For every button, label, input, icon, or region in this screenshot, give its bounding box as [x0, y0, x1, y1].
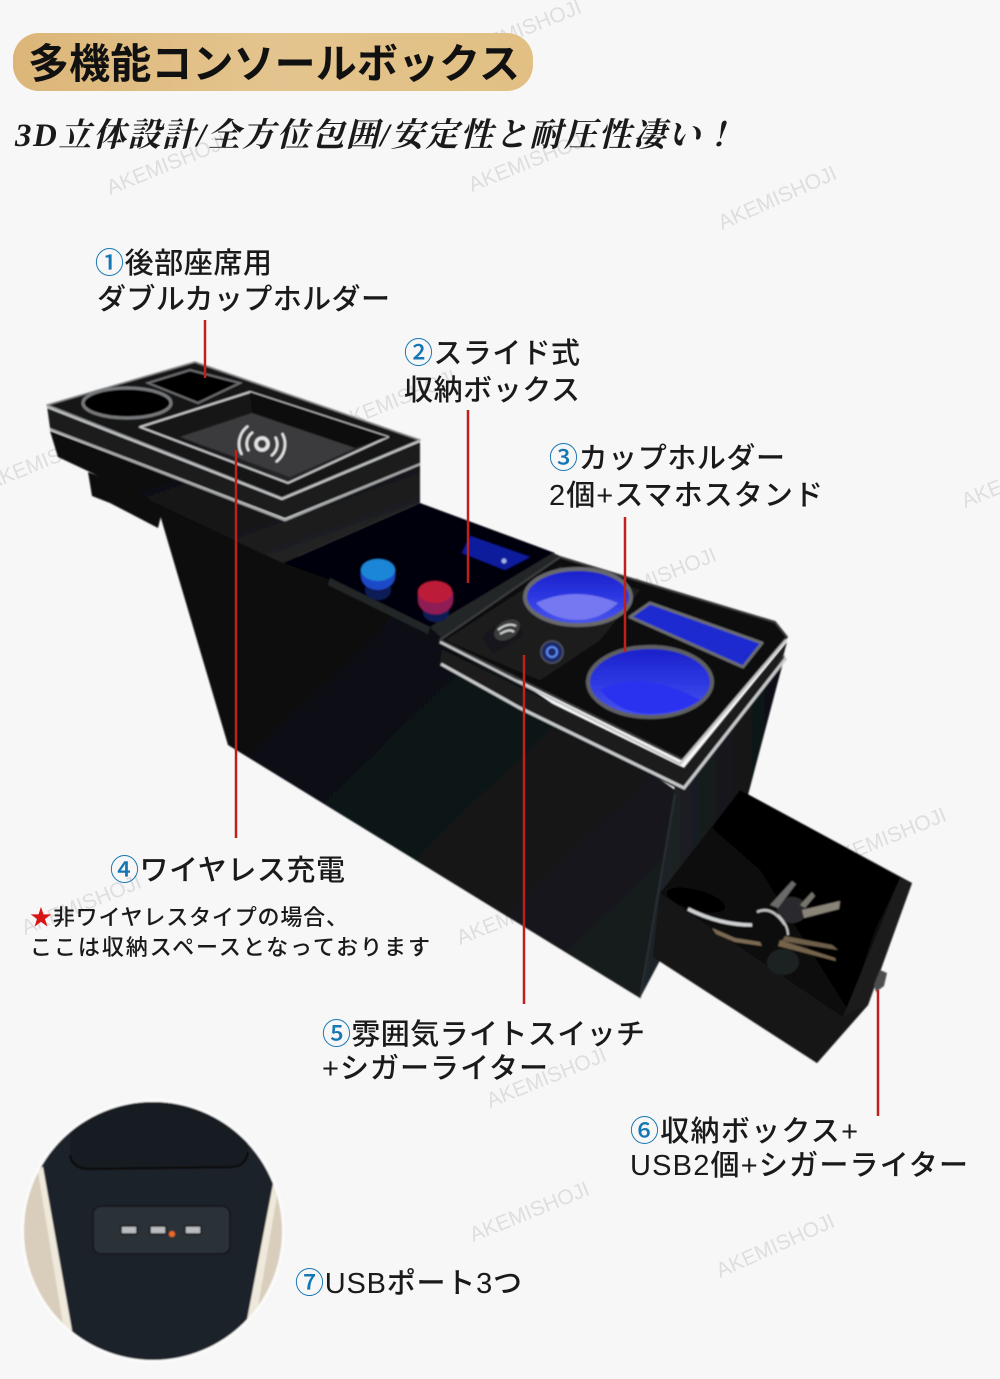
watermarks: AKEMISHOJI: [715, 162, 840, 235]
label 5: [322, 1018, 645, 1085]
note: [30, 905, 430, 960]
watermarks: AKEMISHOJI: [713, 1210, 838, 1283]
label 3: 2個+スマホスタンド: [549, 479, 823, 512]
label 3: [549, 442, 823, 512]
cigarette lighter socket: [481, 615, 525, 654]
USB detail circle: [20, 1095, 285, 1370]
drawer USB port: [874, 970, 887, 992]
ambient light switch: [541, 641, 563, 663]
label 5: ⑤雰囲気ライトスイッチ: [322, 1018, 645, 1051]
middle storage compartment: [283, 503, 565, 640]
label 1: ①後部座席用: [95, 247, 272, 280]
rear cup holder: [83, 388, 171, 418]
watermarks: AKEMISHOJI: [465, 128, 592, 197]
title pill: 多機能コンソールボックス: [28, 41, 520, 87]
label 6: USB2個+シガーライター: [630, 1149, 968, 1182]
label 5: +シガーライター: [322, 1052, 548, 1085]
armrest lid: [70, 1102, 248, 1170]
label 4: ④ワイヤレス充電: [110, 854, 345, 887]
mounting bracket: [88, 472, 165, 528]
label 7: ⑦USBポート3つ: [295, 1267, 522, 1300]
blue bottle: [361, 559, 395, 600]
watermarks: AKEMISHOJI: [823, 804, 950, 873]
watermarks: AKEMISHOJI: [483, 1044, 610, 1113]
body corner highlight: [640, 795, 675, 998]
note: ★非ワイヤレスタイプの場合、: [30, 905, 348, 930]
rear small slot: [148, 370, 240, 403]
label 2: [404, 337, 580, 407]
console body right face: [640, 655, 785, 998]
phone stand slot: [630, 603, 762, 667]
label 3: ③カップホルダー: [549, 442, 785, 475]
red leader lines: [205, 320, 878, 1116]
cream stripes: [38, 1167, 72, 1330]
seat body: [40, 1102, 274, 1361]
front cup holder: [588, 647, 712, 717]
watermarks: AKEMISHOJI: [333, 366, 460, 435]
USB port plate: [93, 1206, 230, 1254]
drawer front panel: [653, 893, 868, 1063]
label 6: [630, 1115, 968, 1182]
keys: [664, 881, 840, 975]
wireless charging tray: [140, 392, 388, 483]
watermarks: AKEMISHOJI: [453, 881, 580, 950]
top plate: [47, 362, 420, 498]
upper armrest: [47, 362, 420, 563]
drawer: [653, 790, 912, 1063]
lower box: [50, 431, 420, 563]
console top plate with cup holders: [440, 557, 787, 790]
console body front face: [155, 498, 675, 998]
label 1: [95, 247, 390, 316]
watermarks: AKEMISHOJI: [18, 871, 145, 940]
product: console box: [47, 362, 912, 1063]
watermarks: AKEMISHOJI: [593, 544, 720, 613]
label 1: ダブルカップホルダー: [97, 283, 390, 316]
drawer right wall: [843, 878, 912, 1017]
watermarks: AKEMISHOJI: [103, 131, 230, 200]
note: ここは収納スペースとなっております: [30, 935, 430, 960]
label 2: 収納ボックス: [404, 374, 580, 407]
icon: wireless charge: [237, 426, 287, 462]
label 2: ②スライド式: [404, 337, 580, 370]
watermarks: AKEMISHOJI: [466, 1178, 593, 1247]
rear cup holder: [525, 569, 631, 625]
subtitle: 3D立体設計/全方位包囲/安定性と耐圧性凄い！: [14, 117, 735, 154]
label 6: ⑥収納ボックス+: [630, 1115, 858, 1148]
red bottle: [418, 581, 453, 622]
